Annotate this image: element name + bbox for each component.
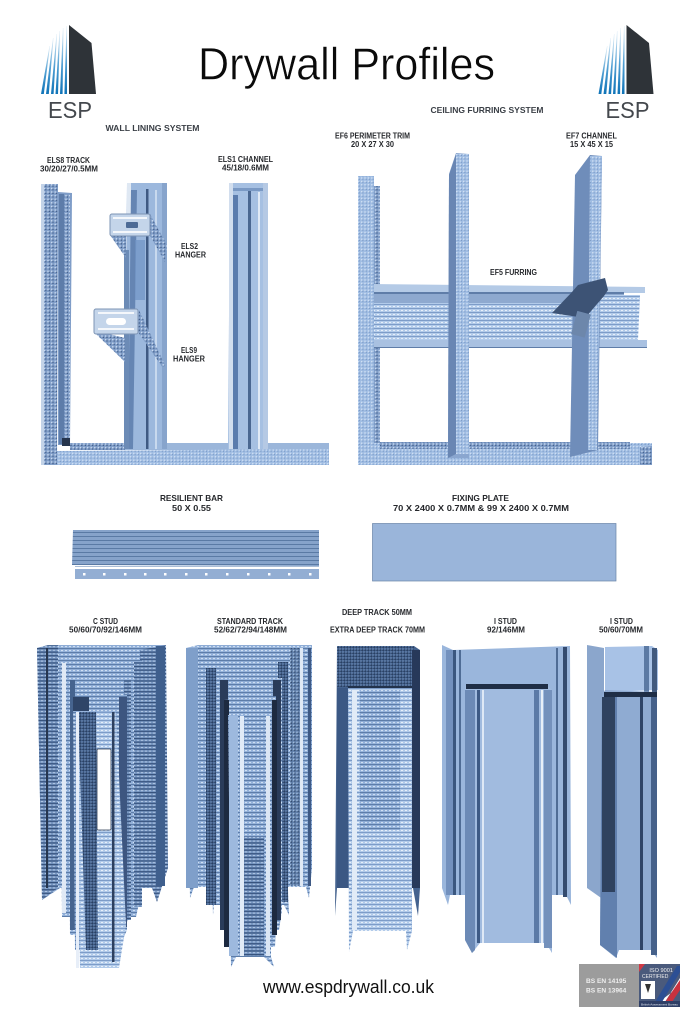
track layer 3 — [220, 678, 282, 930]
EF6 second vertical — [448, 153, 469, 458]
icon: building fan lines left — [41, 26, 67, 94]
label: resilient bar: 50 X 0.55 — [172, 503, 211, 513]
label: C stud — [69, 617, 142, 635]
panel: ISO 9001 certified: ISO 9001 — [649, 968, 673, 974]
panel: BS EN standards: BS EN 14195 — [586, 978, 627, 985]
clip — [552, 278, 608, 318]
label: deep track: DEEP TRACK 50MM — [342, 608, 412, 617]
panel: BS EN standards: BS EN 13964 — [586, 988, 627, 994]
profile: ELS8 track and base track — [41, 184, 329, 465]
base track — [70, 443, 329, 450]
label: EF5 furring: EF5 FURRING — [490, 268, 537, 277]
logo: ESP right: ESP — [606, 97, 650, 123]
stud layer 2 — [60, 660, 142, 917]
profile: ceiling furring assembly — [358, 153, 652, 465]
heading: wall lining system: WALL LINING SYSTEM — [106, 123, 200, 133]
badge: standards and ISO 9001 certification — [579, 964, 680, 1007]
track layer 4 — [224, 696, 277, 947]
title: Drywall Profiles — [198, 38, 495, 90]
label: C stud: C STUD — [93, 617, 118, 626]
ELS9 hanger — [94, 309, 165, 368]
label: standard track — [214, 617, 287, 635]
stud layer 3 — [68, 678, 131, 935]
inner C stud with service hole — [76, 712, 126, 968]
label: I stud 92/146: I STUD — [494, 617, 517, 626]
label: EF6 perimeter trim: 20 X 27 X 30 — [351, 140, 395, 149]
label: ELS8 track — [40, 156, 98, 174]
logo: ESP left: ESP — [48, 97, 92, 123]
label: I stud 92/146: 92/146MM — [487, 626, 525, 635]
label: I stud 92/146 — [487, 617, 525, 635]
label: ELS2 hanger: ELS2 — [181, 242, 199, 251]
label: ELS2 hanger — [175, 242, 206, 260]
label: ELS2 hanger: HANGER — [175, 250, 206, 260]
track layer 2 — [206, 661, 289, 915]
logo: ESP right — [598, 25, 654, 123]
profile: fixing plate — [372, 524, 616, 581]
EF6 perimeter trim — [358, 176, 652, 465]
label: EF7 channel: 15 X 45 X 15 — [570, 140, 614, 149]
profile: ELS1 channel — [228, 183, 268, 449]
panel: BS EN standards — [579, 964, 639, 1007]
inner track — [228, 713, 274, 967]
label: fixing plate: 70 X 2400 X 0.7MM & 99 X 2400 X 0.7MM — [393, 503, 569, 513]
panel: ISO 9001 certified: British Assessment Bureau — [641, 1002, 678, 1006]
label: ELS1 channel: 45/18/0.6MM — [222, 164, 269, 172]
website url: www.espdrywall.co.uk — [262, 977, 435, 997]
label: ELS9 hanger: HANGER — [173, 354, 205, 364]
ELS2 hanger — [110, 214, 167, 262]
label: ELS9 hanger — [173, 346, 205, 364]
label: EF7 channel — [566, 132, 617, 149]
label: ELS8 track: ELS8 TRACK — [47, 156, 90, 165]
panel: ISO 9001 certified: CERTIFIED — [642, 974, 669, 980]
EF7 channel vertical — [570, 155, 602, 457]
label: extra deep track: EXTRA DEEP TRACK 70MM — [330, 626, 425, 634]
profile: I stud 92/146 — [442, 645, 571, 953]
label: EF6 perimeter trim — [335, 132, 410, 149]
stud layer 4 — [73, 695, 127, 950]
label: EF7 channel: EF7 CHANNEL — [566, 132, 617, 140]
label: I stud 50/60/70: I STUD — [610, 617, 633, 626]
profile: hanger stud with ELS2 and ELS9 hangers — [94, 183, 167, 449]
label: fixing plate — [393, 493, 569, 513]
icon: building fan lines right — [598, 26, 624, 94]
label: ELS8 track: 30/20/27/0.5MM — [40, 164, 98, 174]
label: standard track: 52/62/72/94/148MM — [214, 626, 287, 635]
logo: ESP left — [41, 25, 96, 123]
label: I stud 50/60/70 — [599, 617, 643, 635]
profile: resilient bar — [72, 530, 319, 579]
profile: I stud 50/60/70 — [587, 645, 658, 958]
label: resilient bar: RESILIENT BAR — [160, 493, 223, 503]
upright channel — [58, 192, 72, 445]
inner I stud — [465, 684, 552, 953]
heading: ceiling furring system: CEILING FURRING SYSTEM — [430, 105, 544, 115]
label: I stud 50/60/70: 50/60/70MM — [599, 626, 643, 635]
profile: standard track nest — [186, 645, 312, 967]
label: EF6 perimeter trim: EF6 PERIMETER TRIM — [335, 132, 410, 140]
label: fixing plate: FIXING PLATE — [452, 493, 509, 503]
outer track — [186, 645, 312, 898]
label: ELS9 hanger: ELS9 — [181, 346, 198, 355]
label: ELS1 channel — [218, 155, 273, 172]
profile: C stud nest — [37, 645, 168, 968]
label: ELS1 channel: ELS1 CHANNEL — [218, 155, 273, 164]
label: standard track: STANDARD TRACK — [217, 617, 283, 626]
outer C stud — [37, 645, 168, 902]
EF5 furring — [374, 284, 647, 348]
panel: ISO 9001 certified — [639, 964, 680, 1007]
label: resilient bar — [160, 493, 223, 513]
label: C stud: 50/60/70/92/146MM — [69, 626, 142, 635]
profile: deep track — [335, 646, 420, 952]
